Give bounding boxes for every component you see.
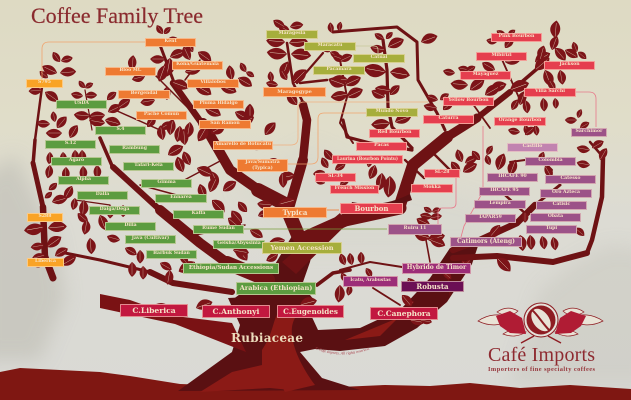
Rubiaceae root label: Rubiaceae	[231, 331, 303, 345]
label: Pink Bourbon: Pink Bourbon	[499, 34, 534, 39]
label: Mundo Novo: Mundo Novo	[376, 109, 408, 114]
tree illustration: © Café Imports. All rights reserved.	[316, 347, 370, 355]
label: Catisic	[536, 201, 587, 210]
label: IAPAR59: IAPAR59	[479, 215, 502, 220]
label: Blue Mt.: Bloo Mt.	[119, 68, 142, 73]
label: Catisic: Catisic	[553, 202, 570, 207]
label: Red Bourbon: Red Bourbon	[378, 130, 411, 135]
label: Rume Sudan	[193, 225, 244, 234]
arrow: Rume Sudan to Ruiru 11	[244, 228, 387, 230]
label: S795: S795	[38, 80, 51, 85]
label: San Ramon	[199, 120, 251, 129]
label: Kona/Guatemala: Kona/Guatemala	[176, 62, 219, 67]
leaves	[23, 17, 610, 326]
label: Mokka	[411, 184, 453, 193]
arrow: Catuai to Maracatu	[356, 46, 378, 54]
label: Catesso: Catesso	[561, 176, 580, 181]
label: Mundo Novo	[366, 108, 418, 117]
label: Maragogype: Maragogype	[277, 88, 312, 94]
label: Bergendal: Bergendal	[131, 91, 157, 96]
label: Catuai	[353, 54, 405, 63]
label: Yemen Accession	[262, 242, 342, 254]
label: Rambung	[109, 145, 160, 154]
label: Pluma Hidalgo	[193, 100, 244, 108]
label: Mibirizi: Mibirizi	[491, 53, 512, 58]
title: Coffee Family Tree	[31, 3, 203, 28]
label: Mayaguez: Mayaguez	[473, 72, 498, 77]
label: S288: S288	[39, 214, 51, 219]
label: Ruiru 11	[388, 224, 442, 235]
label: C.Anthonyi: C.Anthonyi	[213, 307, 259, 316]
label: Ethiopia/Sudan Accessions: Ethiopia/Sudan Accessions	[189, 265, 273, 271]
label: Dilla	[105, 222, 156, 230]
label: Agaro: Agaro	[69, 158, 84, 163]
label: IHCAFE 95	[479, 187, 530, 196]
logo leaves	[478, 308, 603, 336]
label: Pacamara	[313, 66, 365, 75]
label: Pacas	[356, 142, 407, 151]
label: C.Canephora	[370, 307, 438, 320]
copyright line	[315, 338, 392, 354]
label: Jackson: Jackson	[559, 62, 580, 67]
brand name: Café Imports	[488, 344, 595, 366]
label: Castillo: Castillo	[523, 144, 542, 149]
label: Liberica	[27, 258, 64, 267]
label: Barbuk Sudan: Barbuk Sudan	[153, 251, 190, 256]
label: IHCAFE 95: IHCAFE 95	[490, 188, 519, 193]
label: S.4: S.4	[117, 127, 124, 132]
label: Kaffa: Kaffa	[192, 211, 205, 216]
label: Sarchimor: Sarchimor	[576, 129, 602, 134]
line: Maragogype to Caturra	[273, 102, 428, 145]
logo: Café Imports emblem	[478, 303, 603, 343]
background mist	[0, 145, 631, 385]
label: Maracatu: Maracatu	[318, 43, 342, 48]
label: Tafari-Kela	[123, 162, 174, 170]
label: Yemen Accession: Yemen Accession	[270, 244, 334, 252]
arrow: Caturra to Catimors	[461, 126, 483, 237]
label: Orange Bourbon: Orange Bourbon	[499, 118, 541, 123]
ground	[0, 368, 631, 400]
label: C.Eugenoides: C.Eugenoides	[283, 307, 338, 316]
label: Caturra: Caturra	[439, 116, 458, 121]
label: Typica: Typica	[283, 208, 307, 217]
label: Obata: Obata	[548, 214, 563, 219]
label: Rambung: Rambung	[122, 146, 147, 151]
label: SL-28	[424, 169, 460, 178]
label: Padre Comun	[136, 111, 187, 120]
label: Yellow Bourbon	[443, 97, 494, 106]
label: Java (Cultivar): Java (Cultivar)	[132, 236, 169, 241]
label: IHCAFE 90	[487, 173, 538, 182]
label: Java/Sumatra (Typica): Java/Sumatra (Typica)	[245, 160, 280, 170]
label: C.Eugenoides	[277, 305, 344, 318]
Bourbon crescent	[350, 194, 412, 210]
label: French Mission: French Mission	[335, 186, 374, 191]
label: Maracatu	[304, 42, 356, 51]
label: USDA	[56, 100, 107, 109]
label: Ethiopia/Sudan Accessions	[183, 263, 279, 274]
label: Villalobos: Villalobos	[200, 80, 226, 85]
label: Icatu, Arabustas: Icatu, Arabustas	[350, 278, 391, 283]
label: Tupi: Tupi	[546, 226, 557, 231]
label: Catesso	[545, 175, 596, 184]
label: Mayaguez	[460, 71, 511, 80]
label: Robusta: Robusta	[416, 282, 449, 291]
label: SL-28: SL-28	[435, 170, 449, 175]
label: C.Canephora: C.Canephora	[377, 309, 431, 318]
label: Obata	[530, 213, 581, 222]
trunk base	[178, 246, 478, 391]
label: French Mission	[330, 185, 379, 194]
label: Geisha/Abyssinia	[213, 240, 265, 249]
label: Dilla: Dilla	[124, 223, 137, 228]
label: Alpha	[58, 176, 109, 184]
label: Java/Sumatra (Typica)	[237, 159, 288, 172]
label: Amarello de Botucatu	[213, 141, 273, 150]
label: Daiga/Dega: Daiga/Dega	[100, 207, 129, 212]
label: C.Liberica	[120, 304, 188, 317]
label: Barbuk Sudan	[146, 250, 197, 259]
label: Ennarea	[155, 194, 207, 203]
label: IHCAFE 90: IHCAFE 90	[498, 174, 527, 179]
label: Mokka: Mokka	[423, 185, 441, 190]
label: Java (Cultivar)	[125, 235, 176, 244]
label: Oro Azteca	[540, 189, 592, 198]
label: Maragogype-family top cultivar: Maragesia	[279, 31, 305, 36]
label: Lempira: Lempira	[489, 201, 511, 206]
label: Tupi	[526, 225, 577, 234]
label: Tafari-Kela: Tafari-Kela	[134, 163, 163, 168]
label: Catuai: Catuai	[371, 55, 387, 60]
C.Liberica limb	[100, 294, 246, 352]
label: Dalla: Dalla	[96, 192, 109, 197]
label: Padre Comun: Pache Comun	[144, 112, 179, 117]
label: Orange Bourbon	[494, 117, 546, 126]
label: Gimma	[141, 179, 192, 188]
label: IAPAR59	[465, 214, 516, 222]
label: Laurina (Bourbon Pointu): Laurina (Bourbon Pointu)	[337, 156, 398, 161]
label: Bourbon	[340, 203, 403, 214]
arrow: SL-28 to Ruiru 11	[438, 178, 456, 224]
label: Catimors (Ateng): Catimors (Ateng)	[457, 238, 515, 245]
logo medallion	[524, 303, 558, 337]
label: SL-34	[315, 173, 356, 182]
label: Colombia: Colombia	[538, 158, 563, 163]
line: Kent to S795	[42, 42, 145, 79]
label: Robusta	[401, 281, 464, 292]
label: Kaffa	[173, 210, 224, 218]
label: Agaro	[51, 157, 102, 166]
label: Bourbon: Bourbon	[354, 204, 388, 213]
label: S.4	[95, 126, 146, 134]
label: Dalla	[77, 191, 128, 200]
label: Pacamara: Pacamara	[326, 67, 352, 72]
label: Maragogype-family top cultivar	[266, 30, 318, 39]
label: Rume Sudan: Rume Sudan	[202, 226, 235, 231]
label: Catimors (Ateng)	[450, 237, 522, 247]
label: Bergendal	[118, 90, 170, 99]
label: Blue Mt.	[105, 67, 156, 76]
label: Hybrido de Timor: Hybrido de Timor	[407, 264, 466, 271]
label: Red Bourbon	[369, 129, 420, 138]
label: Arabica (Ethiopian)	[236, 282, 316, 295]
label: USDA: USDA	[74, 101, 89, 106]
label: Laurina (Bourbon Pointu)	[332, 155, 403, 164]
label: SL-34: SL-34	[328, 174, 343, 179]
label: C.Anthonyi	[202, 305, 270, 318]
label: Colombia	[525, 157, 576, 166]
label: Caturra	[423, 115, 474, 124]
label: Typica	[263, 207, 327, 218]
connector lines	[42, 42, 596, 237]
label: Ennarea: Ennarea	[170, 195, 192, 200]
line: Mundo Novo to Java	[288, 113, 366, 164]
label: Maragogype	[263, 87, 326, 97]
label: Geisha/Abyssinia: Geisha/Abyssinia	[217, 241, 261, 246]
label: Amarello de Botucatu: Amarello de Botucatu	[215, 142, 271, 147]
label: C.Liberica: C.Liberica	[132, 306, 176, 315]
label: Liberica: Liberica	[35, 259, 56, 264]
label: Castillo	[507, 143, 558, 152]
label: S.12	[45, 140, 96, 149]
Arabica stem	[232, 228, 318, 300]
label: Kent: Kent	[164, 39, 177, 44]
label: Sarchimor	[571, 128, 607, 137]
label: Villa Sarchi	[524, 88, 576, 97]
label: S795	[26, 79, 63, 88]
label: Hybrido de Timor	[402, 263, 471, 274]
label: Lempira	[474, 200, 526, 208]
label: Kent	[145, 38, 196, 47]
label: Pluma Hidalgo: Pluma Hidalgo	[199, 101, 238, 106]
label: Alpha: Alpha	[76, 177, 91, 182]
label: S288	[27, 213, 63, 222]
Robusta limb highlight	[345, 318, 398, 340]
label: Kona/Guatemala	[172, 61, 223, 70]
logo coffee cherries	[496, 311, 526, 334]
label: Jackson	[544, 61, 595, 70]
logo stand	[521, 336, 561, 343]
label: Daiga/Dega	[89, 206, 140, 214]
label: Gimma: Gimma	[157, 180, 176, 185]
label: Ruiru 11: Ruiru 11	[404, 226, 426, 231]
label: Villa Sarchi: Villa Sarchi	[535, 89, 565, 94]
label: Mibirizi	[476, 52, 527, 61]
label: Arabica (Ethiopian): Arabica (Ethiopian)	[240, 284, 312, 292]
label: S.12: S.12	[65, 141, 76, 146]
label: Pacas: Pacas	[374, 143, 389, 148]
label: San Ramon: San Ramon	[210, 121, 240, 126]
label: Oro Azteca: Oro Azteca	[552, 190, 580, 195]
label: Pink Bourbon	[491, 33, 542, 42]
label: Yellow Bourbon: Yellow Bourbon	[448, 98, 489, 103]
label: Villalobos	[187, 79, 239, 88]
arrow: Villa Sarchi to Sarchimor	[576, 92, 596, 127]
brand tagline: Importers of fine specialty coffees	[488, 366, 596, 373]
label: Icatu, Arabustas	[343, 276, 398, 287]
arrow: Typica to Bourbon	[327, 209, 339, 211]
